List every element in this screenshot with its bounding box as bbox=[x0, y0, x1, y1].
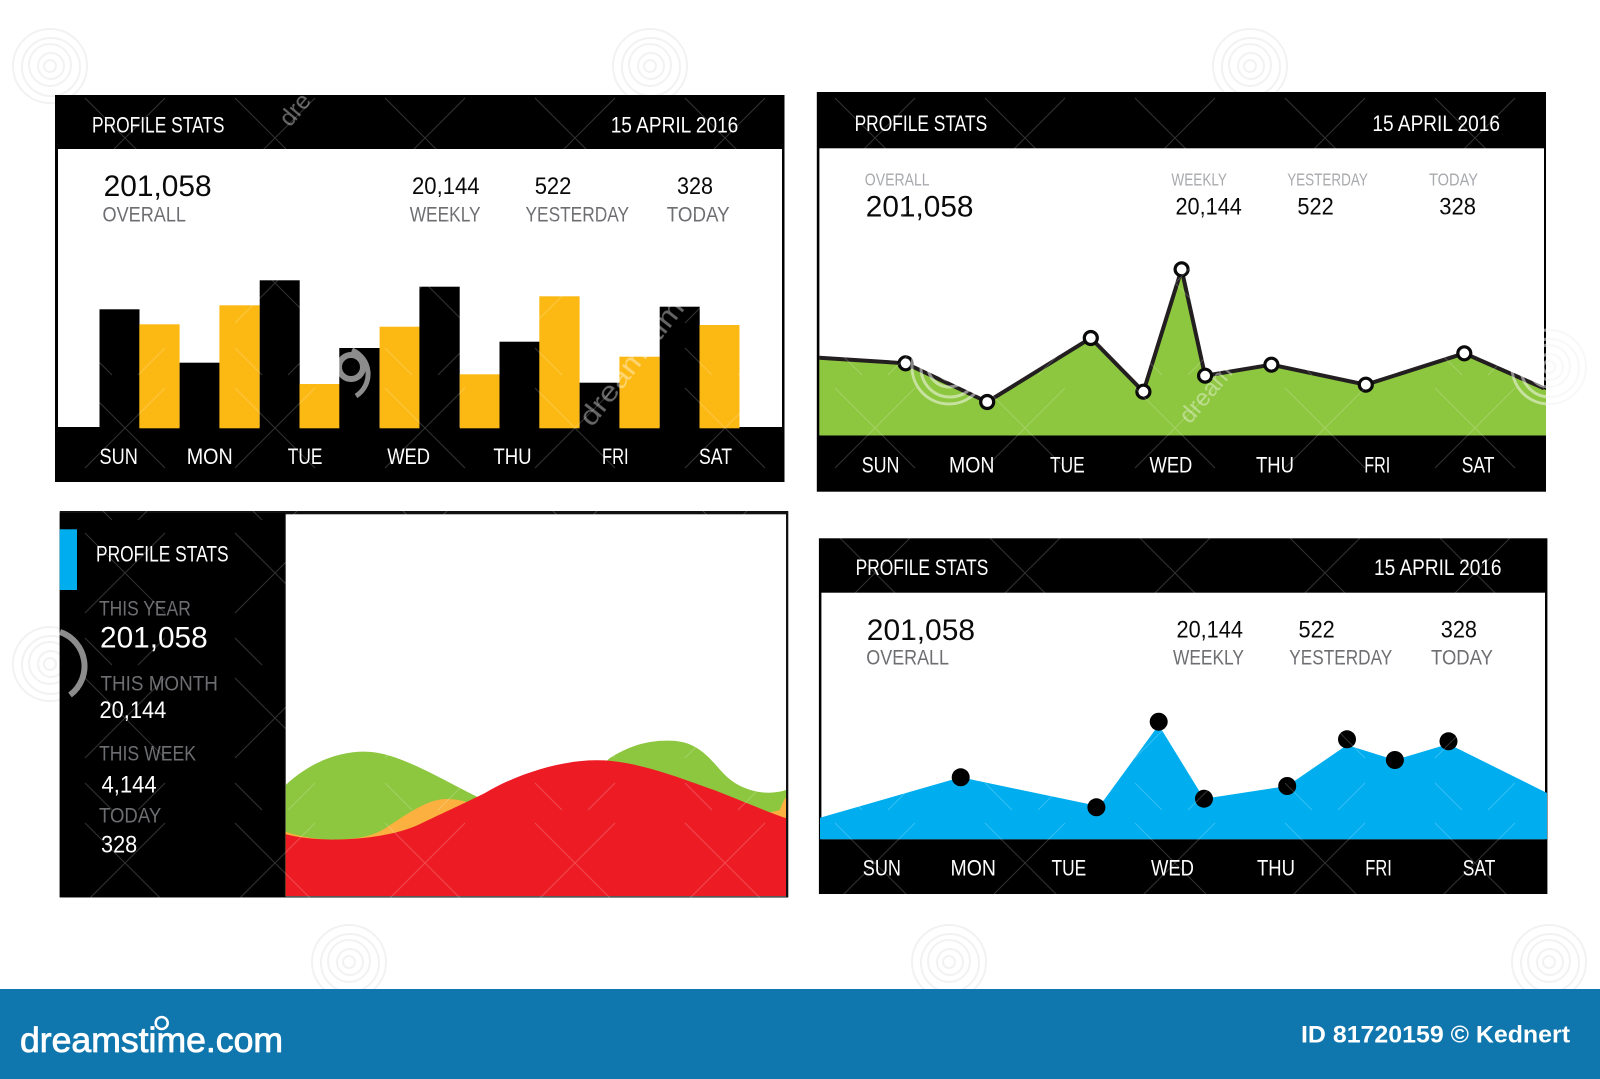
overall stat: OVERALL bbox=[102, 203, 186, 227]
yesterday stat: YESTERDAY bbox=[1289, 645, 1392, 669]
day axis labels: FRI bbox=[1364, 453, 1390, 478]
area chart with dots bbox=[820, 713, 1547, 839]
day axis labels: MON bbox=[949, 453, 994, 478]
bar chart bbox=[100, 280, 740, 429]
day axis labels: TUE bbox=[1050, 453, 1085, 478]
today stat: TODAY bbox=[667, 203, 730, 227]
wave area chart bbox=[286, 741, 786, 896]
panel heading: PROFILE STATS bbox=[92, 113, 224, 138]
overall stat: OVERALL bbox=[866, 645, 949, 669]
day axis labels: TUE bbox=[288, 444, 322, 469]
panel heading: PROFILE STATS bbox=[96, 542, 229, 567]
yesterday stat bbox=[1287, 169, 1368, 220]
today stat: 328 bbox=[677, 173, 713, 200]
today stat bbox=[99, 803, 161, 859]
this week stat: 4,144 bbox=[102, 771, 157, 798]
this year stat bbox=[99, 597, 208, 654]
this month stat: THIS MONTH bbox=[100, 672, 218, 696]
today stat: 328 bbox=[1439, 193, 1476, 220]
overall stat bbox=[865, 169, 974, 224]
overall stat: 201,058 bbox=[866, 191, 974, 224]
panel background bbox=[60, 511, 788, 898]
panel: blue area chart profile stats bbox=[819, 538, 1547, 894]
this week stat: THIS WEEK bbox=[99, 742, 197, 766]
weekly stat bbox=[410, 173, 481, 227]
day axis labels: MON bbox=[187, 444, 233, 469]
overall stat: 201,058 bbox=[867, 614, 975, 647]
day axis labels: THU bbox=[1257, 856, 1295, 881]
day axis labels: MON bbox=[950, 856, 996, 881]
yesterday stat bbox=[526, 173, 629, 227]
weekly stat: 20,144 bbox=[1176, 616, 1243, 643]
day axis labels: THU bbox=[1256, 453, 1294, 478]
weekly stat: 20,144 bbox=[412, 173, 480, 200]
overall stat: OVERALL bbox=[865, 169, 930, 189]
yesterday stat: YESTERDAY bbox=[526, 203, 629, 227]
weekly stat bbox=[1173, 616, 1244, 669]
today stat: TODAY bbox=[1431, 645, 1493, 669]
day axis labels: FRI bbox=[602, 444, 629, 469]
day axis labels: WED bbox=[1150, 453, 1192, 478]
weekly stat: WEEKLY bbox=[1171, 169, 1227, 189]
overall stat: 201,058 bbox=[104, 170, 212, 203]
yesterday stat: 522 bbox=[1298, 616, 1335, 643]
day axis labels: SUN bbox=[863, 856, 901, 881]
panel heading: PROFILE STATS bbox=[855, 111, 987, 136]
day axis labels: WED bbox=[387, 444, 430, 469]
today stat bbox=[1429, 169, 1478, 220]
date: 15 APRIL 2016 bbox=[1372, 111, 1500, 136]
day axis labels: THU bbox=[493, 444, 532, 469]
today stat bbox=[1431, 616, 1493, 669]
day axis labels: WED bbox=[1151, 856, 1194, 881]
this month stat bbox=[100, 672, 218, 724]
weekly stat: WEEKLY bbox=[1173, 645, 1244, 669]
today stat bbox=[667, 173, 730, 227]
panel: green area line chart profile stats bbox=[817, 92, 1546, 492]
this year stat: THIS YEAR bbox=[99, 597, 191, 621]
text: dreamstime bbox=[572, 279, 701, 432]
yesterday stat: 522 bbox=[535, 173, 571, 200]
text: dream bbox=[1174, 359, 1238, 429]
yesterday stat: 522 bbox=[1297, 193, 1334, 220]
today stat: 328 bbox=[1441, 616, 1477, 643]
day axis labels: SAT bbox=[1463, 856, 1495, 881]
panel heading: PROFILE STATS bbox=[856, 555, 988, 580]
accent tab bbox=[60, 529, 77, 590]
day axis labels: SAT bbox=[1462, 453, 1494, 478]
brand logo: dreamstime.com bbox=[20, 1021, 283, 1060]
date: 15 APRIL 2016 bbox=[611, 113, 738, 138]
panel background bbox=[817, 92, 1546, 492]
day axis labels bbox=[862, 453, 1494, 478]
image id and credit: ID 81720159 © Kednert bbox=[1301, 1022, 1570, 1049]
day axis labels bbox=[863, 856, 1495, 881]
this week stat bbox=[99, 742, 197, 798]
weekly stat: WEEKLY bbox=[410, 203, 481, 227]
weekly stat bbox=[1171, 169, 1242, 220]
this year stat: 201,058 bbox=[100, 621, 208, 654]
this month stat: 20,144 bbox=[100, 697, 166, 724]
area line chart bbox=[819, 263, 1546, 436]
panel background bbox=[55, 95, 784, 482]
today stat: 328 bbox=[101, 832, 137, 859]
day axis labels: FRI bbox=[1365, 856, 1392, 881]
panel background bbox=[819, 538, 1547, 894]
today stat: TODAY bbox=[99, 803, 161, 827]
overall stat bbox=[102, 170, 212, 227]
overall stat bbox=[866, 614, 975, 669]
panel: bar chart profile stats bbox=[55, 95, 784, 482]
day axis labels: TUE bbox=[1052, 856, 1086, 881]
weekly stat: 20,144 bbox=[1176, 193, 1242, 220]
yesterday stat bbox=[1289, 616, 1392, 669]
date: 15 APRIL 2016 bbox=[1374, 555, 1502, 580]
panel: sidebar stacked wave chart bbox=[60, 511, 788, 898]
day axis labels: SAT bbox=[699, 444, 732, 469]
yesterday stat: YESTERDAY bbox=[1287, 169, 1368, 189]
today stat: TODAY bbox=[1429, 169, 1478, 189]
text: dre bbox=[274, 88, 317, 132]
day axis labels: SUN bbox=[862, 453, 900, 478]
day axis labels bbox=[100, 444, 732, 469]
day axis labels: SUN bbox=[100, 444, 138, 469]
footer bar bbox=[0, 989, 1600, 1079]
